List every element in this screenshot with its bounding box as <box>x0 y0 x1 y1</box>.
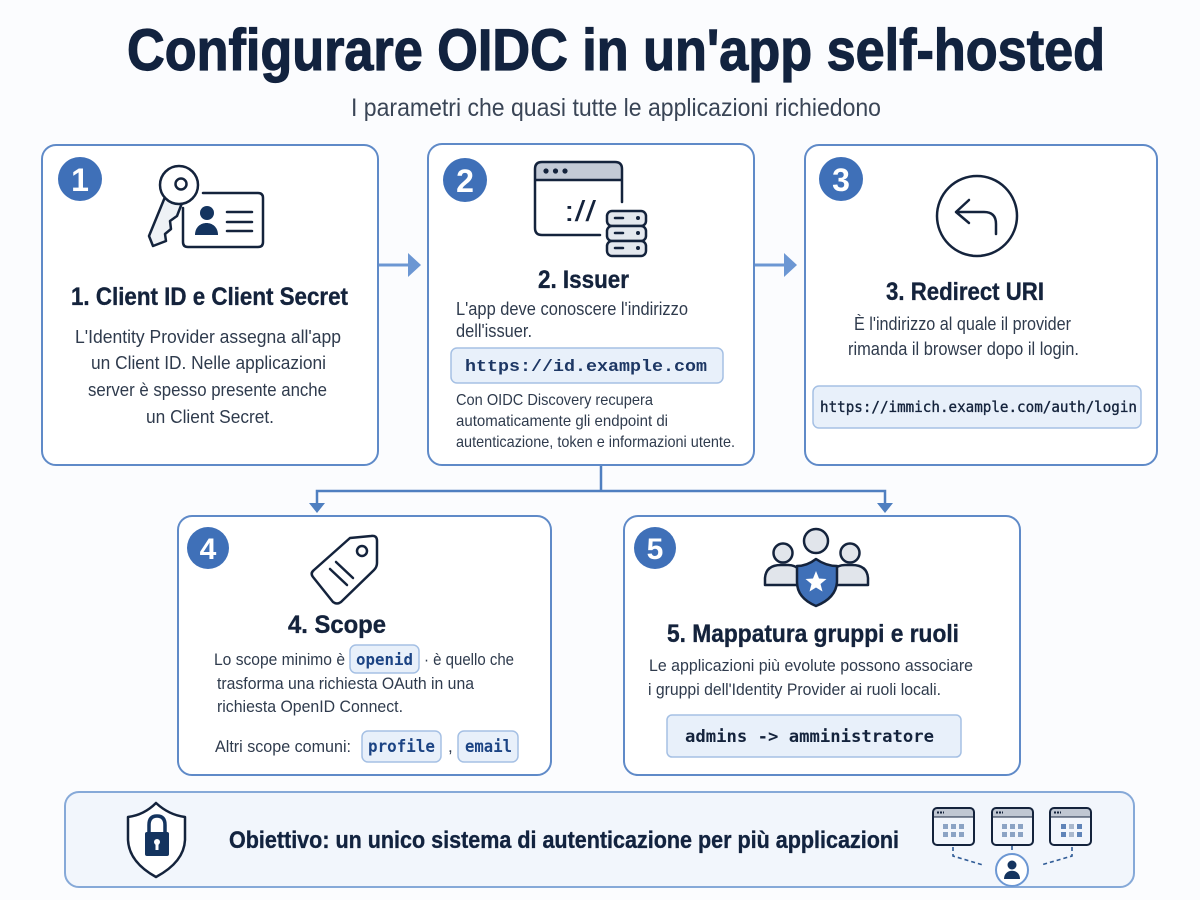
badge 1 <box>58 157 102 201</box>
arrow: step 1 to step 2 <box>378 253 421 277</box>
arrow: step 2 branching to steps 4 and 5 <box>309 466 893 513</box>
body text 5: i gruppi dell'Identity Provider ai ruoli locali. <box>648 680 941 699</box>
code box: issuer URL: https://id.example.com <box>465 358 707 377</box>
banner text: Obiettivo: un unico sistema di autenticazione per più applicazioni <box>229 827 899 854</box>
heading 4: 4. Scope <box>288 611 386 639</box>
body text 4: Lo scope minimo è <box>214 650 345 669</box>
body text 4 <box>214 645 518 762</box>
title: Configurare OIDC in un'app self-hosted <box>127 18 1105 83</box>
icon: return arrow in circle <box>937 176 1017 256</box>
badge 2: 2 <box>456 163 474 199</box>
badge 1: 1 <box>71 162 89 198</box>
body text 1 <box>75 327 341 427</box>
heading 3: 3. Redirect URI <box>886 278 1044 306</box>
body text 1: server è spesso presente anche <box>88 380 327 400</box>
window 2 <box>992 808 1033 845</box>
badge 2 <box>443 158 487 202</box>
arrow: step 2 to step 3 <box>754 253 797 277</box>
subtitle: I parametri che quasi tutte le applicazioni richiedono <box>351 94 881 122</box>
window 1 <box>933 808 974 845</box>
icon: three app windows linked to one user <box>933 808 1091 886</box>
icon: key and ID card <box>149 166 263 247</box>
body text 5 <box>648 656 973 699</box>
chip: email: email <box>465 737 512 757</box>
chip: profile <box>362 731 441 762</box>
body text 2b <box>456 392 735 451</box>
panel: step 4 scope <box>178 516 551 775</box>
badge 5 <box>634 527 676 569</box>
body text 1: L'Identity Provider assegna all'app <box>75 327 341 347</box>
banner: objective <box>65 792 1134 887</box>
body text 3: È l'indirizzo al quale il provider <box>854 314 1071 334</box>
icon: shield with padlock <box>128 803 185 877</box>
body text 2: dell'issuer. <box>456 321 532 341</box>
badge 3 <box>819 157 863 201</box>
body text 2b: automaticamente gli endpoint di <box>456 413 668 430</box>
body text 4: richiesta OpenID Connect. <box>217 697 403 716</box>
window 3 <box>1050 808 1091 845</box>
icon: tag <box>312 536 377 604</box>
chip: email <box>458 731 518 762</box>
chip: profile: profile <box>368 737 435 757</box>
code box: redirect URL: https://immich.example.com/auth/login <box>820 398 1137 416</box>
body text 2b: autenticazione, token e informazioni utente. <box>456 434 735 451</box>
badge 3: 3 <box>832 162 850 198</box>
badge 4: 4 <box>200 533 217 566</box>
code box: mapping <box>667 715 961 757</box>
code box: redirect URL <box>813 386 1141 428</box>
body text 5: Le applicazioni più evolute possono associare <box>649 656 973 675</box>
icon: browser window and server <box>535 162 646 256</box>
badge 5: 5 <box>647 533 663 566</box>
heading 1: 1. Client ID e Client Secret <box>71 283 349 311</box>
body text 4: Altri scope comuni: <box>215 737 351 756</box>
heading 2: 2. Issuer <box>538 266 629 294</box>
icon: users with shield <box>765 529 868 606</box>
user circle <box>996 854 1028 886</box>
body text 3 <box>848 314 1079 359</box>
panel: step 1 client ID and secret <box>42 145 378 465</box>
body text 3: rimanda il browser dopo il login. <box>848 339 1079 359</box>
body text 4: , <box>448 737 453 756</box>
chip: openid <box>350 645 419 673</box>
body text 4: trasforma una richiesta OAuth in una <box>217 674 474 693</box>
panel: step 2 issuer <box>428 144 754 465</box>
body text 1: un Client Secret. <box>146 407 274 427</box>
body text 2b: Con OIDC Discovery recupera <box>456 392 653 409</box>
code box: issuer URL <box>451 348 723 383</box>
badge 4 <box>187 527 229 569</box>
panel: step 5 group and role mapping <box>624 516 1020 775</box>
icon: browser window and server: :// <box>564 196 597 228</box>
body text 2: L'app deve conoscere l'indirizzo <box>456 299 688 319</box>
panel: step 3 redirect URI <box>805 145 1157 465</box>
body text 2 <box>456 299 688 341</box>
code box: mapping: admins -> amministratore <box>685 727 934 747</box>
body text 1: un Client ID. Nelle applicazioni <box>91 353 326 373</box>
chip: openid: openid <box>356 650 413 669</box>
heading 5: 5. Mappatura gruppi e ruoli <box>667 620 959 648</box>
body text 4: · è quello che <box>424 650 514 669</box>
